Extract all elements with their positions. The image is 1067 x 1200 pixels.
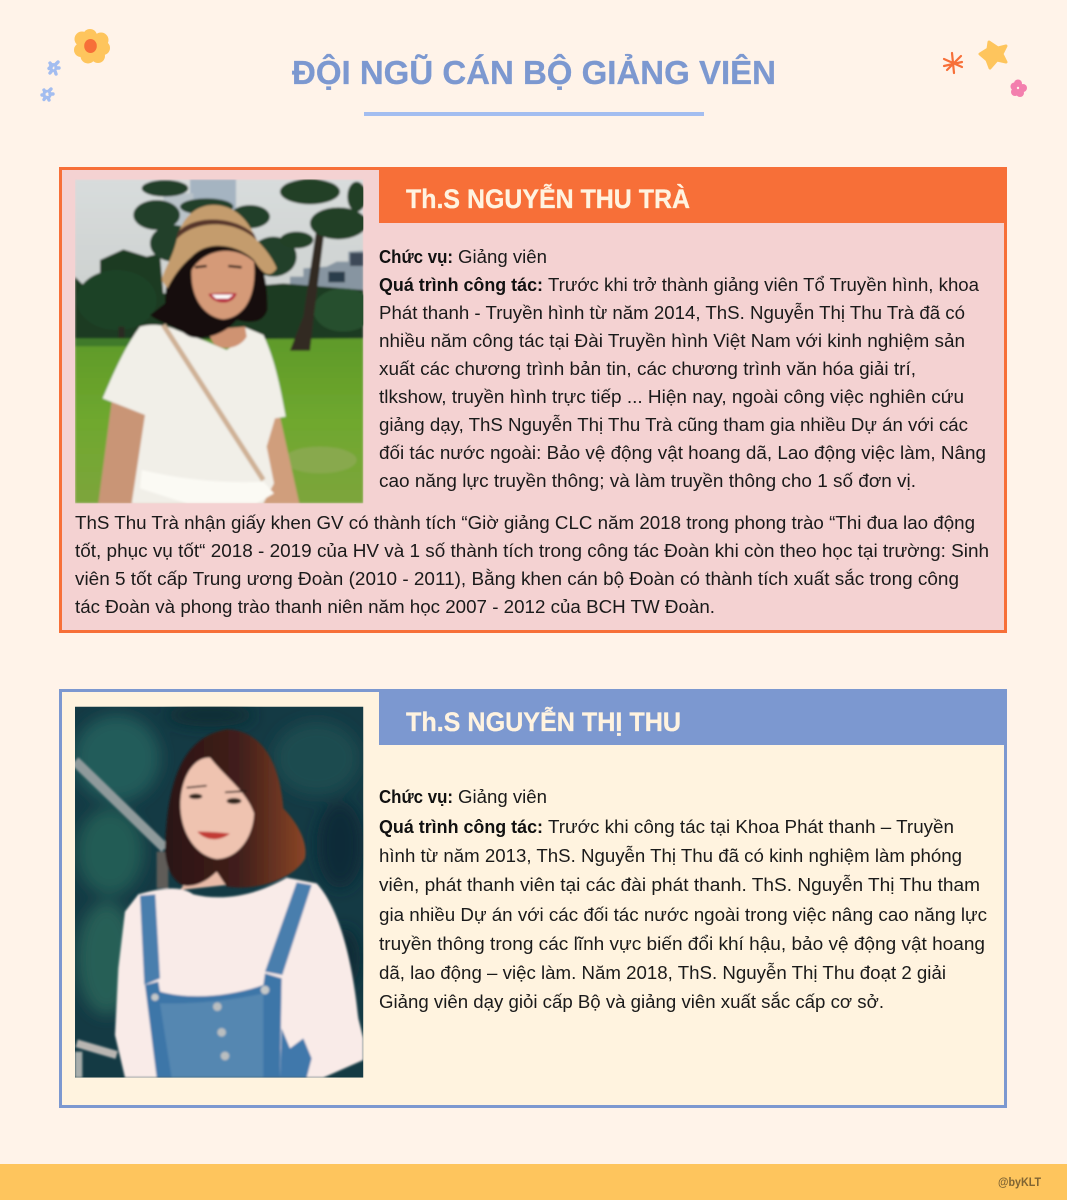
panel 2 role and career text: Quá trình công tác: <box>379 817 543 837</box>
panel 2 role and career text: Giảng viên dạy giỏi cấp Bộ và giảng viên xuất sắc cấp cơ sở. <box>379 991 884 1012</box>
icon: pink flower <box>1010 80 1027 97</box>
panel 2 role and career text: truyền thông trong các lĩnh vực biến đổi khí hậu, bảo vệ động vật hoang <box>379 934 985 954</box>
panel 2 role and career text: gia nhiều Dự án với các đối tác nước ngoài trong việc nâng cao năng lực <box>379 905 987 925</box>
panel: Nguyễn Thu Trà <box>60 167 1007 632</box>
icon: orange flower <box>74 29 110 64</box>
panel 1 achievements text: ThS Thu Trà nhận giấy khen GV có thành tích “Giờ giảng CLC năm 2018 trong phong trào “Thi đua lao động <box>75 513 975 533</box>
panel 1 achievements text: viên 5 tốt cấp Trung ương Đoàn (2010 - 2011), Bằng khen cán bộ Đoàn có thành tích xuất sắc trong công <box>75 568 959 589</box>
icon: yellow star <box>980 42 1006 68</box>
panel 1 role and career text: Quá trình công tác: <box>379 275 543 295</box>
panel 2 name header: Th.S NGUYỄN THỊ THU <box>406 706 681 737</box>
panel 1 role and career text: Giảng viên <box>458 247 547 267</box>
panel 1 role and career text: Phát thanh - Truyền hình từ năm 2014, ThS. Nguyễn Thị Thu Trà đã có <box>379 302 965 323</box>
panel 1 achievements text: tốt, phục vụ tốt“ 2018 - 2019 của HV và 1 số thành tích trong công tác Đoàn khi còn theo học tại trường: Sinh <box>75 541 989 561</box>
footer bar <box>0 1164 1067 1200</box>
panel 2 role and career text <box>379 787 987 1012</box>
panel 1 role and career text: xuất các chương trình bản tin, các chương trình văn hóa giải trí, <box>379 359 916 379</box>
panel 2 role and career text: hình từ năm 2013, ThS. Nguyễn Thị Thu đã có kinh nghiệm làm phóng <box>379 845 962 866</box>
panel 1 achievements text <box>75 513 989 617</box>
panel 2 role and career text: Trước khi công tác tại Khoa Phát thanh – Truyền <box>548 817 954 837</box>
panel 1 role and career text <box>379 247 986 491</box>
panel 2 role and career text: Giảng viên <box>458 787 547 807</box>
panel 1 role and career text: Chức vụ: <box>379 247 453 267</box>
panel 2 role and career text: Chức vụ: <box>379 787 453 807</box>
panel 1 role and career text: Trước khi trở thành giảng viên Tổ Truyền hình, khoa <box>548 275 980 295</box>
icon: blue flower bottom <box>42 89 53 100</box>
panel 1 role and career text: giảng dạy, ThS Nguyễn Thị Thu Trà cũng tham gia nhiều Dự án với các <box>379 414 968 435</box>
panel 2 role and career text: viên, phát thanh viên tại các đài phát thanh. ThS. Nguyễn Thị Thu tham <box>379 874 980 895</box>
photo: woman in straw hat in a park <box>75 179 373 503</box>
panel 1 role and career text: nhiều năm công tác tại Đài Truyền hình Việt Nam với kinh nghiệm sản <box>379 331 965 351</box>
panel 1 role and career text: cao năng lực truyền thông; và làm truyền thông cho 1 số đơn vị. <box>379 471 916 491</box>
title: ĐỘI NGŨ CÁN BỘ GIẢNG VIÊN <box>292 53 776 92</box>
icon: asterisk <box>944 53 962 73</box>
title underline <box>364 112 704 116</box>
panel 2 frame <box>60 690 1006 1106</box>
photo: woman in denim overalls <box>73 703 363 1078</box>
panel 2 role and career text: dã, lao động – việc làm. Năm 2018, ThS. Nguyễn Thị Thu đoạt 2 giải <box>379 962 946 983</box>
footer credit: @byKLT <box>998 1175 1042 1189</box>
panel 1 role and career text: đối tác nước ngoài: Bảo vệ động vật hoang dã, Lao động việc làm, Nâng <box>379 443 986 463</box>
panel 1 role and career text: tlkshow, truyền hình trực tiếp ... Hiện nay, ngoài công việc nghiên cứu <box>379 387 964 407</box>
icon: blue flower top <box>49 62 59 74</box>
panel 1 achievements text: tác Đoàn và phong trào thanh niên năm học 2007 - 2012 của BCH TW Đoàn. <box>75 597 715 617</box>
panel: Nguyễn Thị Thu <box>60 689 1007 1106</box>
panel 1 name header: Th.S NGUYỄN THU TRÀ <box>406 183 690 214</box>
panel 1 name header <box>379 167 1007 223</box>
panel 2 name header <box>379 689 1007 745</box>
panel 1 frame <box>60 168 1006 632</box>
